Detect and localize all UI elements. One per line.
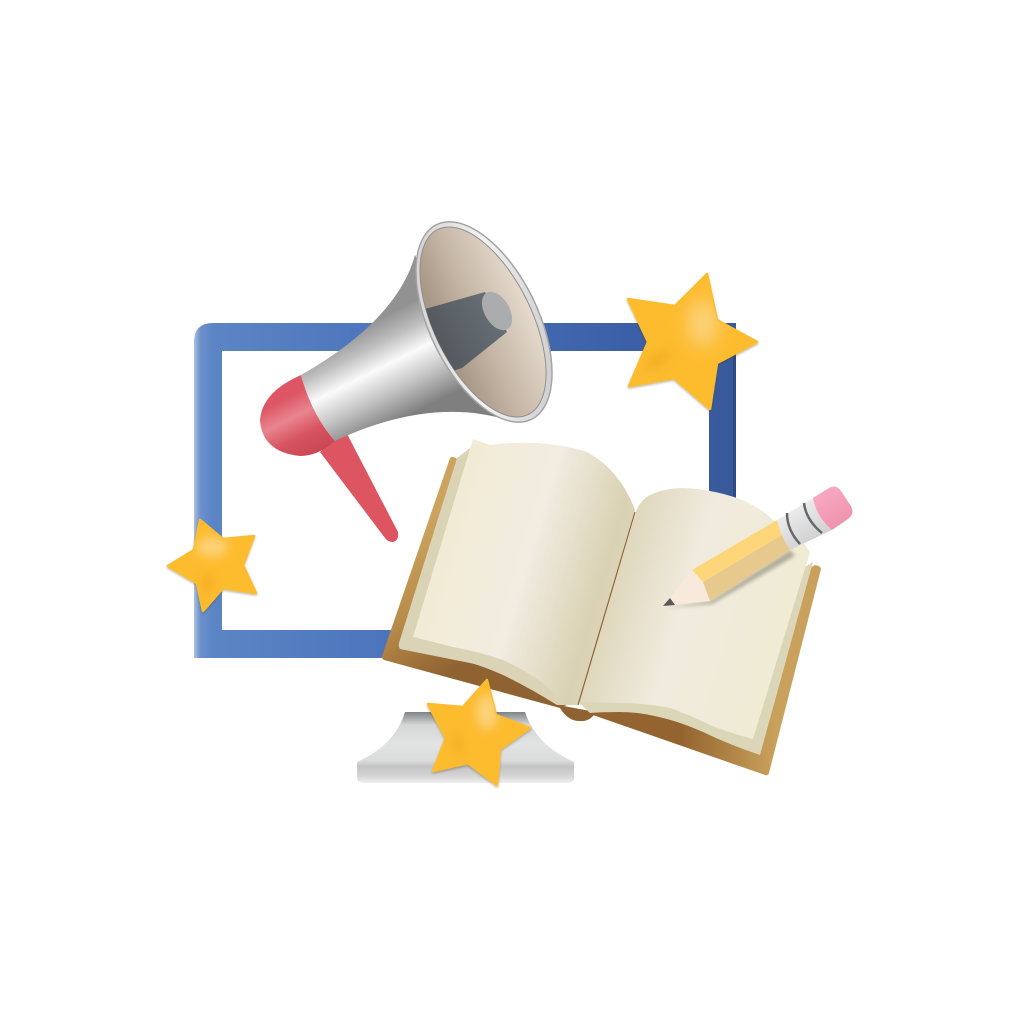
pencil shadow bbox=[664, 550, 795, 608]
book left page stack bbox=[399, 448, 578, 705]
pencil bbox=[663, 487, 852, 608]
megaphone bell rim bbox=[387, 200, 581, 444]
book spine bump bbox=[558, 705, 596, 721]
book left cover bbox=[382, 457, 578, 708]
pencil lower facet bbox=[703, 535, 790, 601]
pencil bands bbox=[787, 503, 822, 544]
book gutter line bbox=[578, 512, 635, 705]
megaphone red tail bbox=[260, 375, 335, 456]
pencil tip bbox=[663, 570, 710, 606]
book left page bbox=[413, 439, 635, 705]
book right page bbox=[579, 488, 810, 739]
star: top right bbox=[628, 274, 757, 409]
megaphone driver bbox=[426, 292, 512, 370]
star: left bbox=[168, 520, 256, 611]
book bbox=[382, 439, 821, 775]
megaphone bell interior bbox=[394, 208, 572, 436]
megaphone bbox=[260, 221, 553, 542]
book right page stack bbox=[579, 562, 813, 755]
pencil eraser bbox=[813, 487, 852, 530]
monitor frame bbox=[194, 323, 736, 658]
illustration: monitor, megaphone, book, pencil and stars bbox=[166, 221, 852, 789]
megaphone handle bbox=[320, 430, 398, 542]
pencil lead bbox=[663, 598, 675, 606]
book right cover bbox=[590, 565, 821, 775]
pencil upper facet bbox=[692, 520, 782, 582]
pencil ferrule bbox=[777, 498, 832, 550]
monitor stand bbox=[357, 712, 574, 783]
megaphone cone bbox=[301, 255, 507, 441]
star: bottom bbox=[428, 680, 530, 785]
